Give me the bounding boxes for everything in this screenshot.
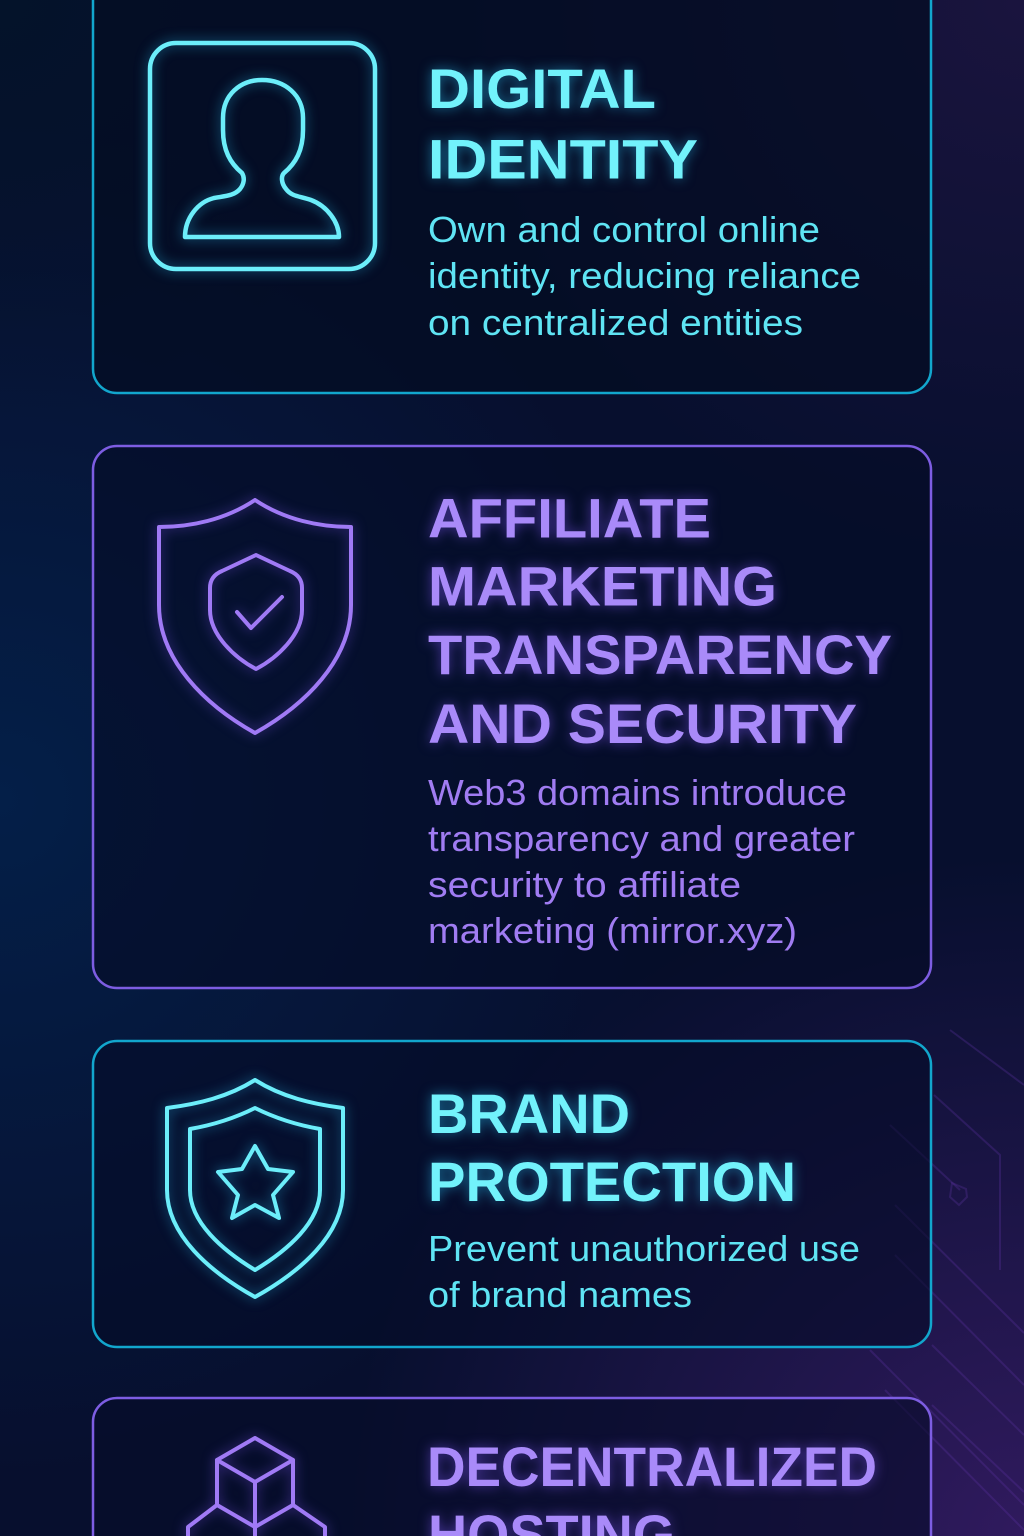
heading: affiliate marketing: AFFILIATE — [428, 486, 711, 550]
heading: brand protection: BRAND — [428, 1082, 630, 1145]
circuit lines — [870, 1030, 1024, 1530]
panel: brand protection — [93, 1041, 931, 1347]
description: digital identity: identity, reducing reliance — [428, 255, 861, 296]
heading: digital identity: IDENTITY — [428, 128, 698, 190]
description: affiliate marketing: Web3 domains introduce — [428, 772, 847, 813]
heading: digital identity: DIGITAL — [428, 57, 656, 120]
heading: affiliate marketing: TRANSPARENCY — [428, 623, 892, 686]
heading: digital identity — [428, 57, 698, 190]
description: affiliate marketing: security to affiliate — [428, 864, 741, 905]
heading: brand protection: PROTECTION — [428, 1150, 796, 1213]
panel: affiliate marketing — [93, 446, 931, 988]
description: affiliate marketing — [428, 772, 855, 951]
heading: decentralized hosting — [427, 1435, 877, 1536]
panel: decentralized hosting — [93, 1398, 931, 1536]
description: affiliate marketing: transparency and greater — [428, 818, 855, 859]
heading: affiliate marketing — [428, 486, 892, 755]
description: affiliate marketing: marketing (mirror.xyz) — [428, 910, 797, 951]
description: digital identity: on centralized entities — [428, 302, 803, 343]
heading: decentralized hosting: DECENTRALIZED — [427, 1435, 877, 1498]
icon: shield with star — [167, 1080, 343, 1297]
icon: stacked cubes — [188, 1438, 325, 1536]
heading: affiliate marketing: AND SECURITY — [428, 692, 857, 755]
description: brand protection: of brand names — [428, 1274, 692, 1315]
description: digital identity: Own and control online — [428, 209, 820, 250]
panel: digital identity — [93, 0, 931, 393]
heading: brand protection — [428, 1082, 796, 1213]
heading: affiliate marketing: MARKETING — [428, 554, 777, 618]
description: digital identity — [428, 209, 861, 343]
icon: shield with check — [159, 500, 351, 733]
description: brand protection: Prevent unauthorized use — [428, 1228, 860, 1269]
icon: user profile — [150, 43, 375, 269]
description: brand protection — [428, 1228, 860, 1315]
